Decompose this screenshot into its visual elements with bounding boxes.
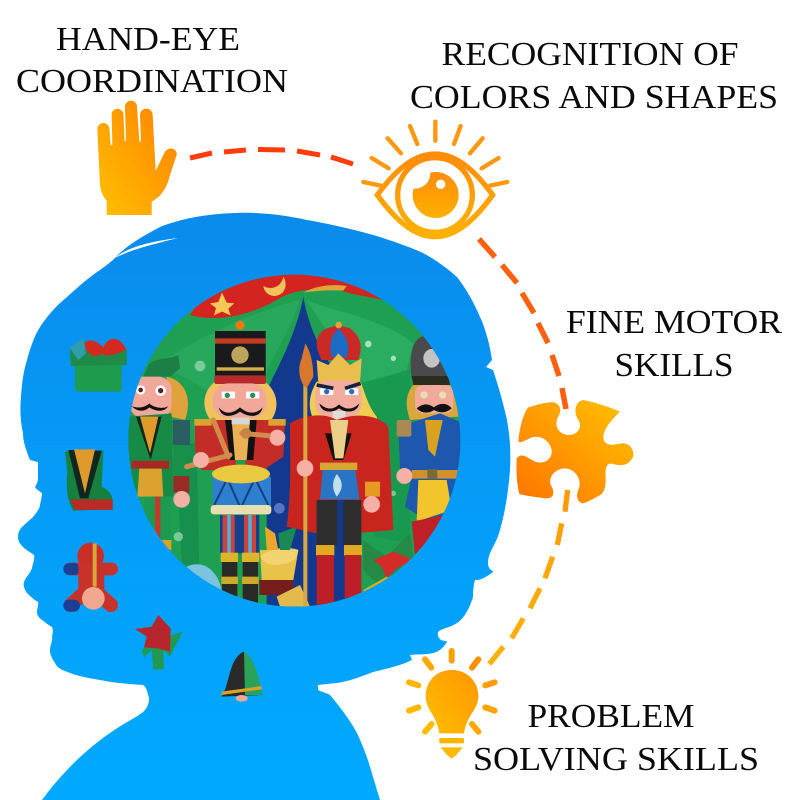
nutcracker: king <box>287 322 393 607</box>
nutcracker: drummer <box>187 321 286 603</box>
heading: problem solving skills: SOLVING SKILLS <box>473 741 759 778</box>
heading: recognition of colors and shapes: RECOGNITION OF <box>442 36 738 73</box>
heading: fine motor skills: FINE MOTOR <box>566 304 782 341</box>
nutcracker puzzle circle <box>120 270 470 620</box>
piece: star <box>135 615 183 669</box>
heading: hand-eye coordination <box>16 21 288 100</box>
nutcracker: blue soldier <box>396 336 463 555</box>
icon: eye <box>363 122 507 237</box>
piece: gift box <box>69 338 127 392</box>
heading: recognition of colors and shapes: COLORS AND SHAPES <box>410 79 778 116</box>
heading: hand-eye coordination: HAND-EYE <box>56 21 240 58</box>
piece: bell <box>222 652 263 702</box>
arrow: eye to puzzle <box>479 239 566 409</box>
cake and ornament <box>187 527 310 607</box>
nutcracker: green elf <box>127 355 190 550</box>
icon: light bulb <box>409 651 495 759</box>
heading: hand-eye coordination: COORDINATION <box>16 63 288 100</box>
arrow: puzzle to bulb <box>489 490 568 664</box>
curtain background <box>120 270 470 620</box>
red canopy with star and moon <box>190 270 383 318</box>
piece: gingerbread <box>69 543 112 610</box>
arrow: hand to eye <box>190 150 353 164</box>
puzzle pieces floating in the head <box>65 338 263 702</box>
heading: problem solving skills <box>473 698 759 778</box>
heading: problem solving skills: PROBLEM <box>528 698 694 735</box>
piece: boot <box>65 449 113 511</box>
heading: fine motor skills: SKILLS <box>614 347 734 384</box>
heading: fine motor skills <box>566 304 782 384</box>
child head silhouette <box>18 213 510 800</box>
icon: hand <box>97 101 177 215</box>
holly and bow <box>363 534 414 592</box>
icon: puzzle piece <box>516 400 633 503</box>
heading: recognition of colors and shapes <box>410 36 778 116</box>
